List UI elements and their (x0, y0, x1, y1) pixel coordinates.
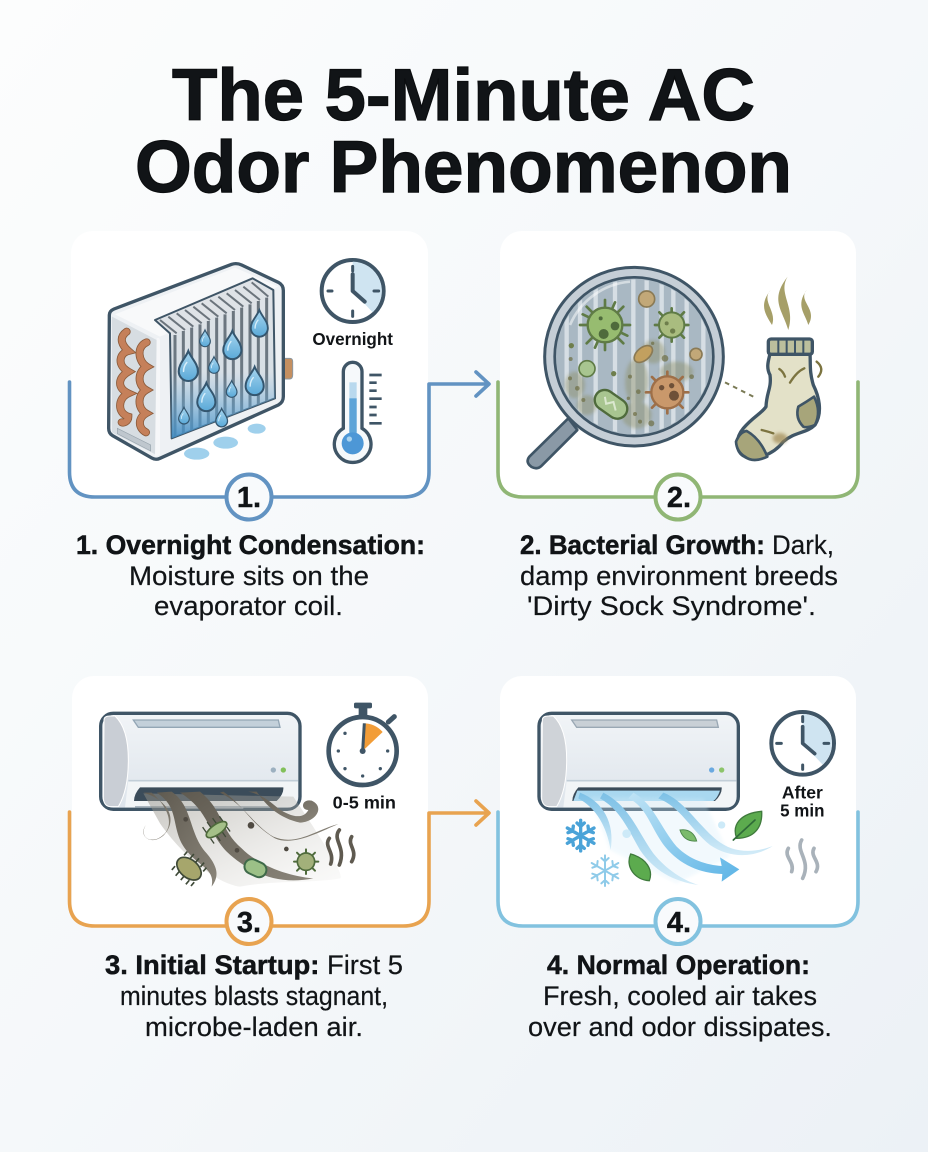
label: After 5 min: 5 min (780, 801, 824, 821)
microbes (169, 813, 318, 888)
microbes (580, 300, 688, 413)
caption 4: Fresh, cooled air takes (543, 981, 817, 1011)
icon: snowflakes (567, 820, 618, 886)
illustration 3 (101, 703, 397, 888)
card 1 (71, 231, 428, 497)
smoke (143, 792, 341, 887)
caption 1: evaporator coil. (154, 591, 343, 621)
panel: step 2 bacterial growth (498, 231, 858, 621)
number badge 2 (656, 474, 700, 520)
caption 4: 4. Normal Operation: (547, 950, 810, 980)
frame 4 (498, 812, 858, 926)
icon: AC unit dirty air (101, 713, 300, 809)
icon: stopwatch (329, 703, 397, 785)
panel: step 3 initial startup (70, 676, 489, 1042)
cool air streams (578, 793, 773, 885)
caption 4: over and odor dissipates. (528, 1012, 832, 1042)
caption 2: damp environment breeds (520, 561, 838, 591)
icon: magnifying glass (528, 267, 723, 468)
dashed connector (725, 382, 753, 397)
card 4 (500, 676, 856, 926)
illustration 4 (539, 712, 834, 886)
icon: clock (322, 260, 384, 322)
number badge 1 (226, 474, 272, 520)
panel: step 4 normal operation (498, 676, 858, 1042)
caption 1: 1. Overnight Condensation: (76, 530, 425, 560)
card 3 (72, 676, 428, 926)
icon: thermometer (334, 362, 382, 462)
label: After 5 min: After (782, 783, 823, 803)
icon: leaves (629, 811, 762, 881)
caption 2 (520, 530, 838, 621)
panel: step 1 overnight condensation (70, 231, 489, 621)
caption 1: Moisture sits on the (129, 561, 369, 591)
frame 3 with arrow (70, 801, 489, 926)
caption 3: 3. Initial Startup: First 5 (105, 950, 403, 980)
title (135, 55, 792, 208)
caption 2: 'Dirty Sock Syndrome'. (527, 591, 816, 621)
caption 3: minutes blasts stagnant, (120, 981, 388, 1011)
icon: odor waves (764, 277, 811, 330)
frame 2 (498, 382, 858, 497)
label: After 5 min (780, 783, 824, 821)
caption 2: 2. Bacterial Growth: Dark, (520, 530, 834, 560)
caption 3 (105, 950, 403, 1042)
icon: dirty sock (736, 339, 821, 460)
caption 3: microbe-laden air. (145, 1012, 363, 1042)
number badge 4 (656, 899, 700, 944)
label: Overnight: Overnight (312, 329, 393, 349)
icon: clock (771, 712, 834, 775)
caption 4 (528, 950, 832, 1042)
illustration 2 (528, 267, 821, 468)
number badge 2: 2. (667, 482, 691, 514)
frame 1 with arrow (70, 372, 489, 497)
title: Odor Phenomenon (135, 127, 792, 208)
label: 0-5 min: 0-5 min (333, 793, 396, 813)
number badge 3: 3. (237, 907, 261, 939)
caption 1 (76, 530, 425, 621)
number badge 4: 4. (667, 907, 691, 939)
icon: fading odor waves (787, 840, 818, 878)
mould specks (568, 342, 694, 426)
icon: evaporator coil (109, 264, 293, 460)
title: The 5-Minute AC (172, 55, 755, 136)
number badge 1: 1. (237, 482, 261, 514)
number badge 3 (226, 899, 272, 944)
card 2 (500, 231, 856, 497)
icon: odor waves (328, 830, 354, 865)
icon: AC unit fresh air (539, 713, 738, 809)
illustration 1 (109, 260, 393, 462)
